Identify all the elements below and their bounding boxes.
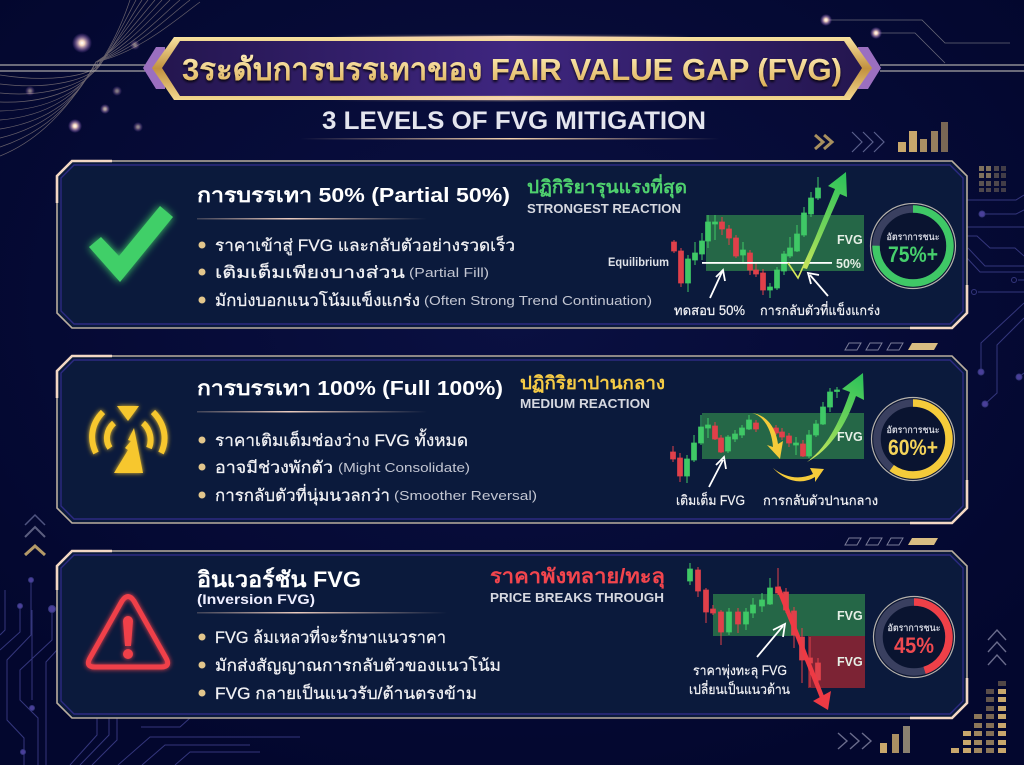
bullet list: FVG กลายเป็นแนวรับ/ต้านตรงข้าม [215, 683, 477, 703]
bullet list: ราคาเติมเต็มช่องว่าง FVG ทั้งหมด [215, 428, 468, 450]
reaction label: ปฏิกิริยาปานกลาง [520, 373, 665, 393]
bullet list: (Often Strong Trend Continuation) [424, 293, 652, 308]
win rate ring 45%: 45% [894, 633, 934, 658]
bullet list: (Smoother Reversal) [394, 488, 537, 503]
reaction label [520, 373, 665, 411]
chart: partial fill: การกลับตัวที่แข็งแกร่ง [760, 301, 880, 318]
chart: full fill: การกลับตัวปานกลาง [763, 493, 878, 508]
divider [197, 411, 427, 412]
decorative dot grid [979, 166, 1006, 192]
green FVG zone [713, 594, 865, 636]
panel frame [57, 356, 967, 523]
chart: partial fill: 50% [836, 257, 861, 271]
chart: full fill: เติมเต็ม FVG [676, 491, 745, 508]
header connector lines [0, 20, 1024, 71]
panel: inversion FVG [57, 551, 967, 718]
bullet list: (Might Consolidate) [338, 460, 470, 475]
win rate ring 75%: 75%+ [888, 242, 938, 267]
decorative chevrons right [988, 630, 1006, 665]
banner plate [162, 41, 862, 96]
panel heading: การบรรเทา 100% (Full 100%) [197, 378, 503, 400]
icon: red warning triangle [88, 596, 168, 667]
panel heading: (Inversion FVG) [197, 591, 315, 607]
panel heading [197, 567, 361, 607]
win rate ring 75% [870, 204, 956, 288]
chart: inversion: FVG [837, 655, 863, 669]
decorative circuit lines left [0, 578, 57, 765]
reaction label [490, 566, 665, 605]
win rate ring 60%: 60%+ [888, 435, 938, 460]
frame highlights [57, 161, 967, 328]
chart labels: FVG [837, 609, 863, 623]
title banner [143, 36, 881, 100]
bullet list: เติมเต็มเพียงบางส่วน [215, 262, 405, 282]
reaction label: ราคาพังทลาย/ทะลุ [490, 566, 665, 589]
reaction label: ปฏิกิริยารุนแรงที่สุด [527, 174, 687, 199]
candles [674, 217, 763, 295]
frame highlights [57, 551, 967, 718]
decorative chevrons left [25, 515, 45, 555]
chart labels: FVG [837, 233, 863, 247]
divider [197, 218, 427, 220]
icon: green check [89, 206, 173, 282]
chart labels: FVG [837, 430, 863, 444]
banner side wings [143, 47, 881, 89]
equilibrium line [702, 262, 832, 264]
title text: 3ระดับการบรรเทาของ FAIR VALUE GAP (FVG) [182, 52, 842, 87]
decorative circuit lines bottom [70, 718, 300, 765]
bullet list: อาจมีช่วงพักตัว [215, 459, 333, 477]
decorative equalizer bottom-right [951, 681, 1006, 753]
decorative bars top [898, 122, 948, 152]
green arrow [807, 373, 864, 462]
banner glow bottom [330, 97, 690, 100]
yellow arrow down [752, 413, 783, 459]
panel frame [57, 161, 967, 328]
subtitle underline [300, 138, 720, 140]
panel: 100% mitigation [57, 356, 967, 523]
bullet list: (Partial Fill) [409, 265, 489, 280]
yellow arrow right [773, 468, 824, 482]
panel: 50% mitigation [57, 161, 967, 328]
win rate ring 45%: อัตราการชนะ [888, 623, 940, 634]
white arrow [709, 457, 726, 487]
chart: full fill [670, 373, 878, 508]
reaction label: MEDIUM REACTION [520, 396, 650, 411]
subtitle: 3 LEVELS OF FVG MITIGATION [322, 107, 706, 135]
bullet list [198, 626, 501, 703]
reaction label: PRICE BREAKS THROUGH [490, 590, 664, 605]
bullet list: มักส่งสัญญาณการกลับตัวของแนวโน้ม [215, 656, 501, 675]
chart: inversion: เปลี่ยนเป็นแนวต้าน [689, 680, 790, 697]
red FVG zone [808, 636, 865, 688]
white arrow [757, 624, 785, 657]
FVG zone [706, 215, 864, 271]
decorative circuit lines right [964, 195, 1024, 407]
win rate ring 45% [874, 596, 954, 678]
frame highlights [57, 356, 967, 523]
chart: partial fill [608, 172, 880, 318]
decorative parallelograms [845, 343, 938, 545]
bullet list: ราคาเข้าสู่ FVG และกลับตัวอย่างรวดเร็ว [215, 235, 515, 256]
divider [197, 612, 447, 614]
decorative stars [25, 14, 882, 133]
reaction label [527, 174, 687, 216]
decorative chevrons top [815, 132, 884, 152]
green arrow [788, 190, 838, 278]
win rate ring 75%: อัตราการชนะ [886, 232, 940, 243]
banner gold frame [152, 37, 872, 100]
bullet list [198, 428, 537, 506]
win rate ring 60% [872, 398, 954, 480]
bullet list: มักบ่งบอกแนวโน้มแข็งแกร่ง [215, 290, 420, 310]
white arrows [710, 270, 725, 298]
red arrow [778, 587, 822, 697]
chart: partial fill: Equilibrium [608, 257, 669, 269]
candles [698, 567, 818, 687]
FVG zone [702, 413, 864, 459]
panel frame [57, 551, 967, 718]
bullet list [198, 235, 652, 310]
candles [673, 420, 803, 482]
bullet list: FVG ล้มเหลวที่จะรักษาแนวราคา [215, 626, 446, 647]
panel heading: การบรรเทา 50% (Partial 50%) [197, 185, 510, 207]
chart: inversion: ราคาพุ่งทะลุ FVG [693, 663, 787, 679]
decorative wave lines top-left [0, 0, 200, 156]
icon: yellow signal tower [92, 406, 165, 473]
panel heading: อินเวอร์ชัน FVG [197, 567, 361, 592]
chart: inversion [688, 563, 865, 710]
banner glow top [330, 36, 690, 39]
decorative chevrons and bars bottom [838, 726, 910, 753]
bullet list: การกลับตัวที่นุ่มนวลกว่า [215, 484, 390, 506]
win rate ring 60%: อัตราการชนะ [886, 425, 940, 436]
reaction label: STRONGEST REACTION [527, 201, 681, 216]
chart: partial fill: ทดสอบ 50% [674, 303, 745, 318]
